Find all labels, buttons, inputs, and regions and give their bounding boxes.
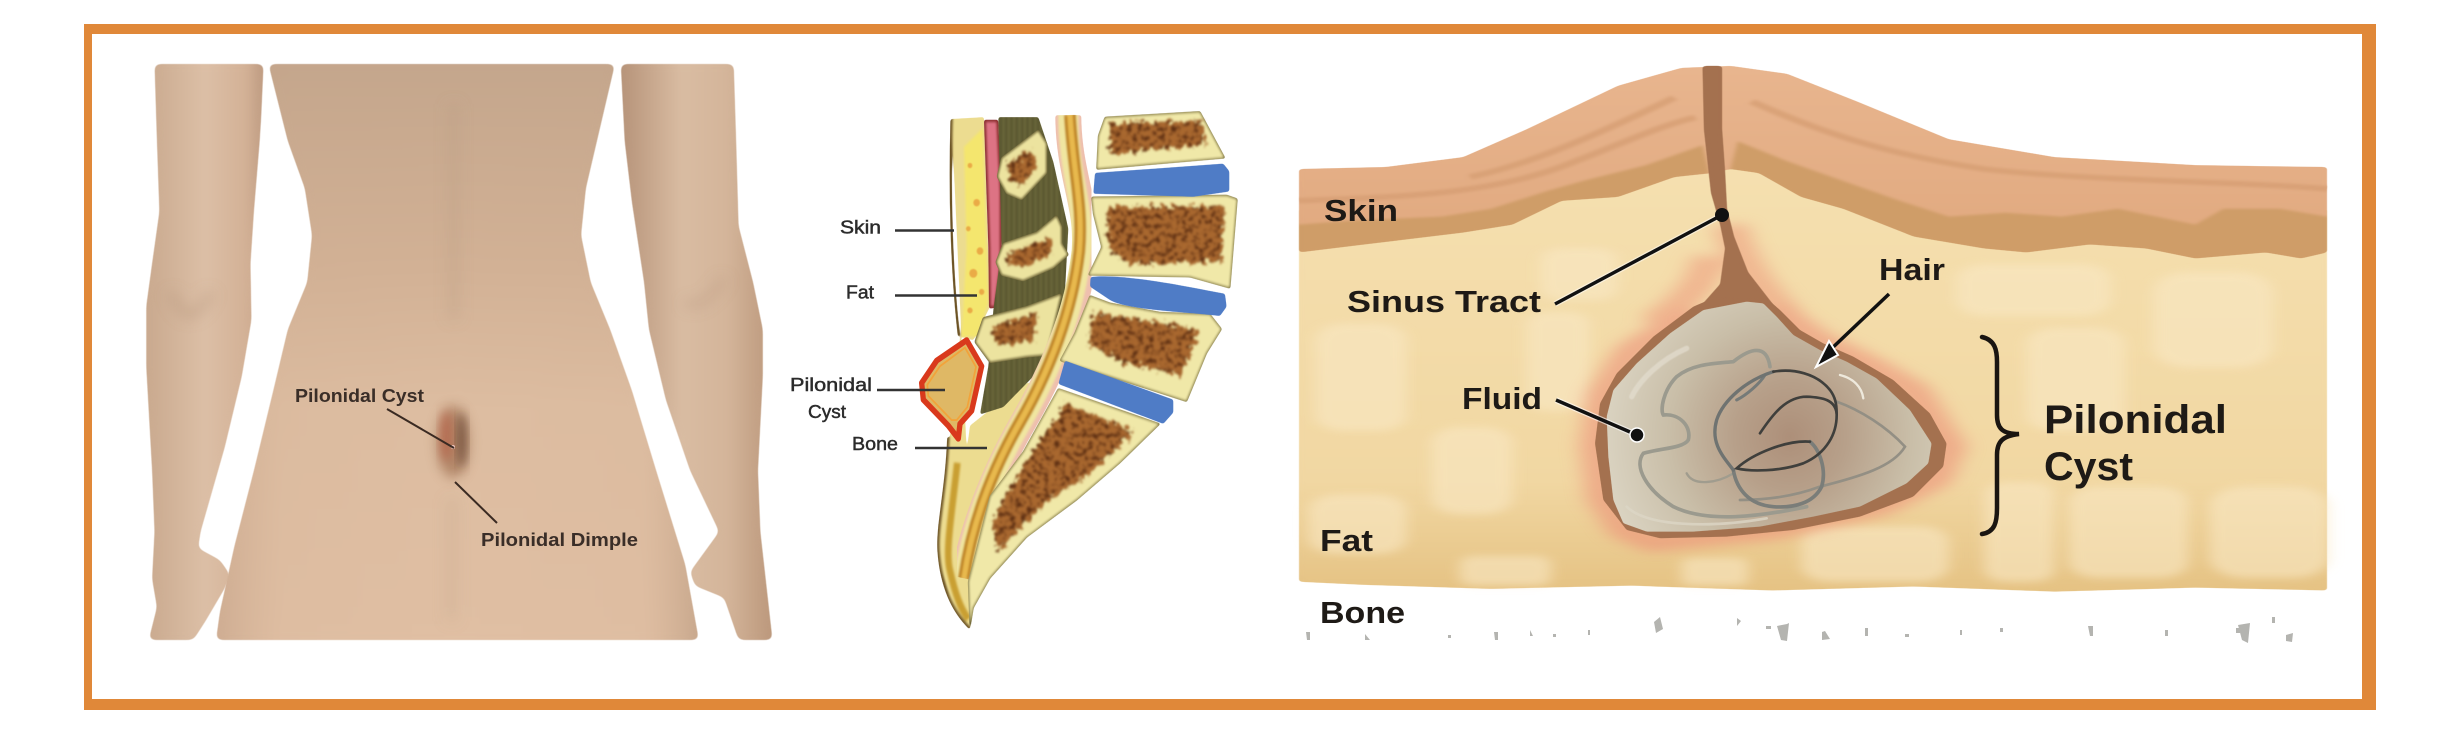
pink inflammation glow [1597, 225, 1949, 542]
brace [1982, 337, 2019, 534]
label: Bone: Bone [1320, 595, 1405, 630]
vertebral bodies [968, 112, 1237, 628]
fat layer [1299, 145, 2329, 592]
label: Sinus Tract with leader: Sinus Tract [1347, 284, 1541, 319]
label: Pilonidal Cyst [790, 375, 945, 422]
bone specks [1306, 617, 2293, 643]
label: Hair with arrow [1816, 252, 1945, 367]
dark hair [1737, 397, 1837, 470]
label: Pilonidal Cyst with leader [295, 386, 454, 448]
label: Fat [846, 282, 977, 302]
dark muscle [980, 117, 1068, 415]
label: Pilonidal Cyst: Pilonidal [790, 375, 872, 395]
label: Skin: Skin [840, 218, 881, 238]
label: Pilonidal Cyst [2044, 398, 2227, 489]
label: Fat: Fat [846, 282, 874, 302]
cyst wall and interior [1595, 297, 1947, 538]
panel: spine cross-section [790, 112, 1237, 628]
label: Skin [840, 218, 954, 238]
label: Fluid with leader [1462, 381, 1644, 442]
blue discs [1058, 164, 1229, 424]
left arm [146, 64, 264, 640]
label: Pilonidal Cyst: Cyst [808, 402, 846, 422]
label: Fat: Fat [1320, 523, 1373, 558]
right arm [621, 64, 773, 640]
torso [216, 64, 699, 640]
sinus tract [1674, 66, 1801, 336]
skin layer [1299, 66, 2327, 258]
pilonidal cyst [922, 340, 982, 439]
label: Sinus Tract with leader [1347, 208, 1729, 319]
lesion [437, 406, 469, 535]
spinous processes [975, 130, 1068, 362]
light grey swirl [1640, 350, 1807, 517]
label: Skin: Skin [1324, 193, 1398, 228]
label: Pilonidal Cyst: Cyst [2044, 445, 2133, 489]
label: Bone: Bone [852, 434, 898, 454]
skin and fat column [938, 117, 1030, 628]
red muscle strip [985, 121, 1001, 307]
spinal canal [963, 115, 1085, 578]
label: Pilonidal Cyst with leader: Pilonidal Cyst [295, 386, 424, 406]
label: Hair with arrow: Hair [1879, 252, 1945, 287]
label: Pilonidal Dimple with leader [455, 482, 638, 550]
label: Fluid with leader: Fluid [1462, 381, 1542, 416]
label: Bone [852, 434, 987, 454]
panel: skin layers diagram [1299, 66, 2329, 643]
label: Pilonidal Cyst: Pilonidal [2044, 398, 2227, 442]
fat specks [966, 163, 984, 313]
label: Pilonidal Dimple with leader: Pilonidal Dimple [481, 530, 638, 550]
panel: back view with pilonidal cyst [146, 64, 773, 640]
